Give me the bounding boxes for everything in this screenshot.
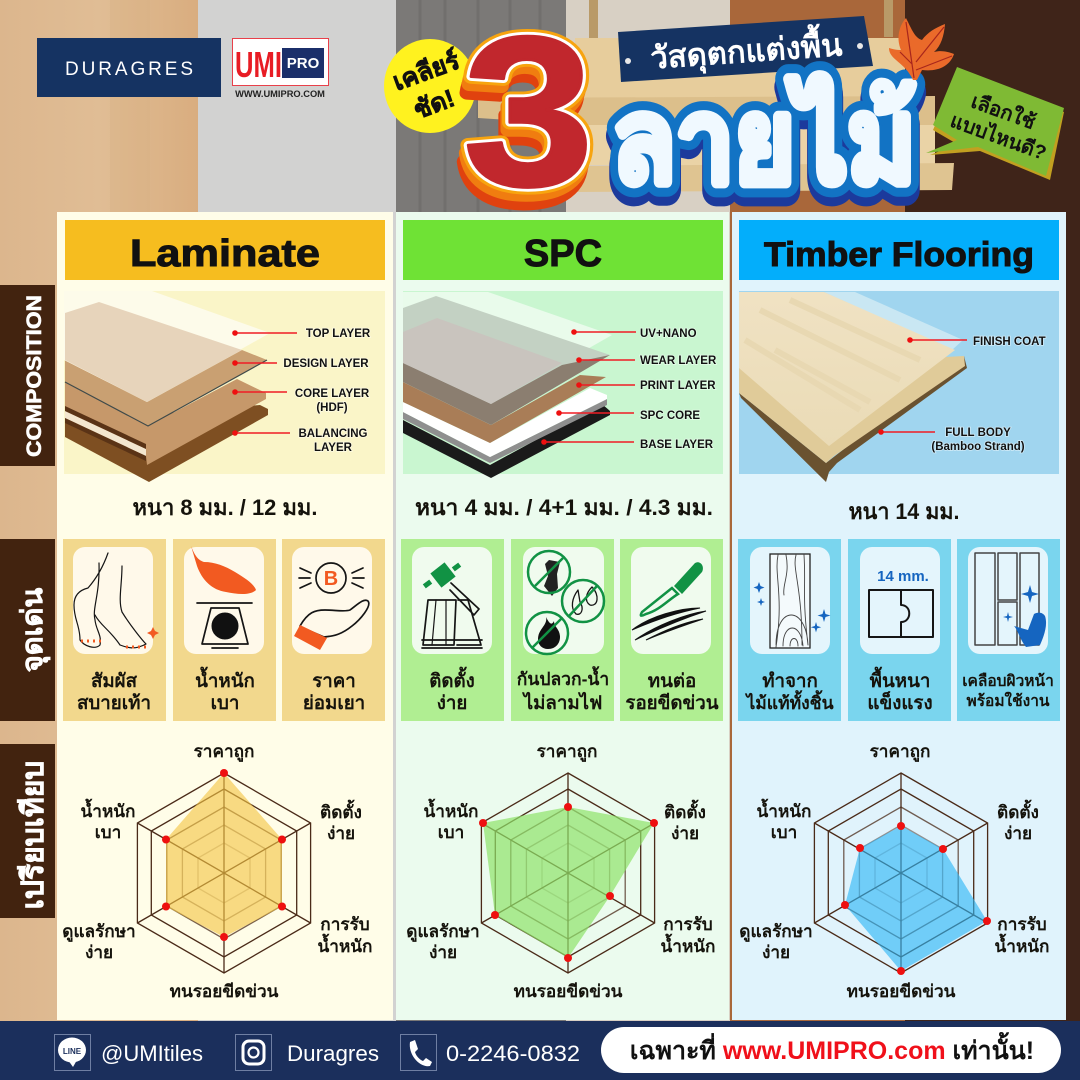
contact: Instagram: Duragres [287,1041,379,1066]
side tab: เปรียบเทียบ: เปรียบเทียบ [17,761,50,909]
composition diagram: Timber [739,291,1059,482]
feature: thick and strong: พื้นหนา [870,667,930,691]
feature: pest water fire proof: กันปลวก-น้ำ [517,666,609,689]
feature: scratch resistant: รอยขีดข่วน [625,692,719,713]
callouts [232,328,371,454]
logo: UMI PRO: PRO [287,55,320,72]
radar chart: Laminate: การรับ [320,914,370,934]
feature: thick and strong: แข็งแรง [867,690,933,713]
composition diagram: SPC [403,291,723,478]
radar chart: Timber: น้ำหนัก [757,798,811,821]
callouts: UV+NANO [640,328,697,340]
callouts [878,336,1046,453]
radar chart: Timber: ทนรอยขีดข่วน [847,981,956,1001]
feature: affordable: B [324,568,338,590]
radar chart: SPC: ราคาถูก [537,741,597,763]
badge: เคลียร์ชัด: เคลียร์ [389,45,464,96]
radar chart: SPC [406,741,715,1001]
radar chart: Timber: เบา [771,822,797,842]
radar chart: Laminate: ดูแลรักษา [62,921,136,943]
radar chart: Timber: ง่าย [762,942,790,962]
radar chart: SPC: เบา [438,822,464,842]
feature: finished surface [957,539,1060,721]
callouts: PRINT LAYER [640,380,716,392]
feature: pest water fire proof [511,539,614,721]
feature: thick and strong: 14 mm. [877,568,929,585]
radar chart: Laminate: เบา [95,822,121,842]
heading: Laminate [65,220,385,280]
callouts: SPC CORE [640,410,700,422]
callouts: (Bamboo Strand) [931,441,1025,453]
contact: LINE: LINE [63,1047,82,1056]
callouts: WEAR LAYER [640,355,717,367]
callouts: LAYER [314,442,353,454]
side tab: จุดเด่น: จุดเด่น [17,588,50,672]
heading: SPC [403,220,723,280]
radar chart: Laminate: น้ำหนัก [318,933,372,956]
side tab: เปรียบเทียบ [0,744,55,918]
feature: easy install: ติดตั้ง [429,667,475,691]
panel: Laminate [57,212,393,1020]
contact: phone [400,1034,580,1070]
feature: finished surface: พร้อมใช้งาน [966,691,1050,710]
radar chart: Timber: ติดตั้ง [997,799,1039,822]
contact: LINE [54,1034,203,1070]
callout pill [601,1027,1061,1073]
rope [589,0,893,40]
badge: เคลียร์ชัด: ชัด! [410,84,459,125]
title: ลายไม้: ลายไม้ [612,82,916,216]
feature: scratch resistant: ทนต่อ [648,670,696,691]
radar chart: SPC: น้ำหนัก [661,933,715,956]
radar chart: Laminate: ทนรอยขีดข่วน [170,981,279,1001]
radar chart: Laminate: ราคาถูก [194,741,254,763]
logo: Duragres [37,38,221,97]
radar chart: Laminate: ง่าย [85,942,113,962]
heading: SPC: SPC [524,233,602,275]
feature: affordable: ย่อมเยา [303,692,365,713]
feature: real wood: ทำจาก [762,670,818,691]
radar chart: SPC: น้ำหนัก [424,798,478,821]
feature: comfort: สบายเท้า [77,692,151,713]
radar chart: Timber: ราคาถูก [870,741,930,763]
logo: UMI PRO: UMI [235,44,282,85]
callout tag: แบบไหนดี? [947,108,1050,165]
panel: Timber Flooring [732,212,1066,1020]
contact: LINE: @UMItiles [101,1041,203,1066]
title banner [618,16,873,82]
contact: phone: 0-2246-0832 [446,1041,580,1066]
feature: scratch resistant [620,539,723,721]
callouts: FINISH COAT [973,336,1046,348]
callouts: (HDF) [316,402,348,414]
radar chart: Laminate [62,741,372,1001]
logo: Duragres: DURAGRES [65,59,193,80]
radar chart: SPC: ง่าย [429,942,457,962]
radar chart: Laminate: ง่าย [327,823,355,843]
radar chart: Timber [739,741,1049,1001]
heading: Timber Flooring: Timber Flooring [764,236,1034,274]
callout tag: เลือกใช้ [968,89,1039,134]
feature: real wood: ไม้แท้ทั้งชิ้น [744,690,834,713]
thickness: Laminate: หนา 8 มม. / 12 มม. [132,495,318,520]
feature: light weight: เบา [211,692,239,713]
radar chart: SPC: ง่าย [671,823,699,843]
title: ลายไม้: ลายไม้ [612,74,916,208]
callouts [541,328,717,451]
feature: pest water fire proof: ไม่ลามไฟ [522,691,602,713]
callouts: DESIGN LAYER [283,358,369,370]
composition diagram: Laminate [64,291,385,482]
callouts: FULL BODY [945,427,1011,439]
feature: light weight [173,539,276,721]
radar chart: Laminate: ติดตั้ง [320,799,362,822]
title: ลายไม้: ลายไม้ [612,74,916,208]
radar chart: SPC: ติดตั้ง [664,799,706,822]
heading: Timber Flooring [739,220,1059,280]
callout tag [926,67,1064,180]
wooden sign [478,38,954,192]
big number 3: 3 [459,9,590,247]
feature: real wood [738,539,841,721]
callouts: BASE LAYER [640,439,714,451]
radar chart: Timber: ดูแลรักษา [739,921,813,943]
contact: Instagram [236,1034,379,1070]
radar chart: Timber: ง่าย [1004,823,1032,843]
radar chart: Laminate: น้ำหนัก [81,798,135,821]
radar chart: SPC: การรับ [663,914,713,934]
logo: UMI PRO: WWW.UMIPRO.COM [235,89,325,99]
thickness: Timber: หนา 14 มม. [848,499,960,524]
big number 3: 3 [461,0,592,238]
radar chart: SPC: ดูแลรักษา [406,921,480,943]
badge: เคลียร์ชัด [384,39,476,133]
thickness: SPC: หนา 4 มม. / 4+1 มม. / 4.3 มม. [415,495,713,520]
feature: comfort: สัมผัส [91,670,138,691]
feature: comfort [63,539,166,721]
side tab: จุดเด่น [0,539,55,721]
feature: affordable [282,539,385,721]
callouts: BALANCING [298,428,368,440]
callouts: TOP LAYER [306,328,371,340]
radar chart: Timber: น้ำหนัก [995,933,1049,956]
feature: finished surface: เคลือบผิวหน้า [962,672,1054,690]
feature: light weight: น้ำหนัก [195,667,255,691]
feature: thick and strong [848,539,951,721]
heading: Laminate: Laminate [130,233,320,275]
side tab: COMPOSITION [0,285,55,466]
leaf icon [889,18,954,80]
feature: easy install: ง่าย [437,692,467,713]
radar chart: SPC: ทนรอยขีดข่วน [514,981,623,1001]
callouts: CORE LAYER [295,388,370,400]
footer [0,1021,1080,1080]
feature: easy install [401,539,504,721]
title banner: วัสดุตกแต่งพื้น [649,21,844,78]
side tab: COMPOSITION: COMPOSITION [23,295,46,457]
radar chart: Timber: การรับ [997,914,1047,934]
panel: SPC [396,212,729,1020]
feature: affordable: ราคา [312,670,356,691]
callout pill: เฉพาะที่ www.UMIPRO.com เท่านั้น! [630,1031,1034,1065]
logo: UMI PRO [232,38,328,99]
